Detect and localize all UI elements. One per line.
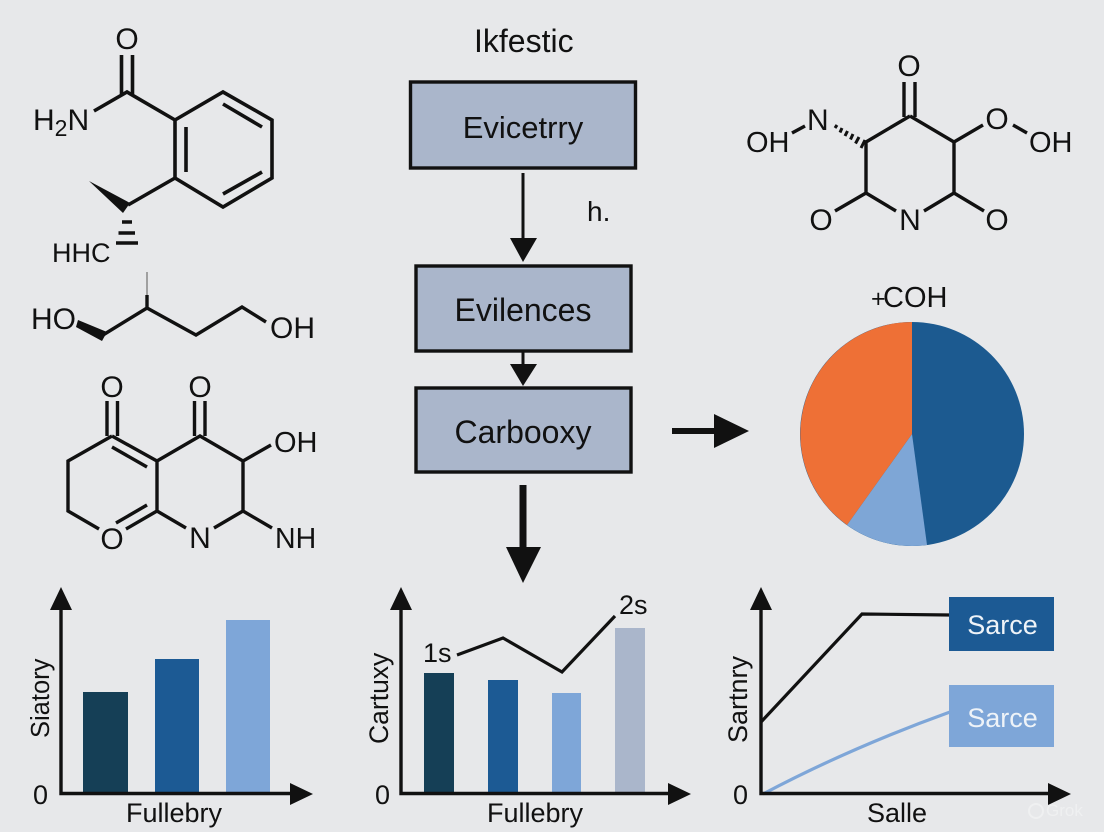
bar chart: left: Fullebry <box>126 798 223 828</box>
molecule: bicyclic lower left: OH <box>274 427 318 459</box>
bar and line chart: middle: 0 <box>375 780 390 810</box>
arrow: right to pie chart <box>672 414 749 448</box>
molecule: top right ring: N <box>899 204 921 237</box>
pie chart label: COH <box>883 282 947 314</box>
pie chart <box>800 322 1024 546</box>
molecule: top right ring: O <box>985 204 1009 237</box>
molecule: top right ring: O <box>809 204 833 237</box>
molecule: diol chain: HO <box>31 303 76 336</box>
bar chart: left: Siatory <box>27 658 55 738</box>
molecule: bicyclic lower left: NH <box>275 523 316 555</box>
molecule: top left benzamide: N <box>67 104 89 137</box>
line chart: right <box>723 587 1071 828</box>
line chart: right: 0 <box>733 780 748 810</box>
molecule: top right ring: N <box>807 104 829 137</box>
flow box: Evicetrry <box>410 82 636 168</box>
molecule: top left benzamide: H <box>33 104 55 137</box>
molecule: top left benzamide: HHC <box>52 238 110 268</box>
molecule: top right ring: O <box>985 103 1009 136</box>
molecule: diol chain: OH <box>270 312 315 345</box>
molecule: bicyclic lower left: O <box>188 371 212 404</box>
arrow: first flow arrow <box>510 173 537 262</box>
line chart: right: Salle <box>867 798 927 828</box>
flow box: Evicetrry: Evicetrry <box>463 110 584 145</box>
line chart: right: Sarce <box>967 703 1038 733</box>
molecule: top left benzamide <box>33 23 272 268</box>
bar and line chart: middle: 2s <box>619 590 648 620</box>
flow box: Carbooxy <box>416 388 631 472</box>
heading: flowchart title: Ikfestic <box>474 23 574 59</box>
molecule: top left benzamide: 2 <box>55 115 67 141</box>
bar and line chart: middle <box>364 587 691 828</box>
molecule: bicyclic lower left: O <box>100 523 124 556</box>
bar and line chart: middle: Cartuxy <box>364 652 394 744</box>
bar chart: left: 0 <box>33 780 48 810</box>
molecule: bicyclic lower left: O <box>100 371 124 404</box>
molecule: top right ring <box>746 50 1072 237</box>
arrow: down to charts <box>506 485 541 583</box>
molecule: bicyclic lower left: N <box>189 522 211 555</box>
bar chart: left <box>27 587 313 828</box>
molecule: top right ring: OH <box>746 127 790 159</box>
watermark <box>1029 801 1083 820</box>
molecule: top right ring: O <box>897 50 921 83</box>
bar and line chart: middle: 1s <box>423 638 452 668</box>
label: h.: h. <box>587 196 610 227</box>
flow box: Carbooxy: Carbooxy <box>455 414 591 450</box>
molecule: top left benzamide: O <box>115 23 139 56</box>
molecule: diol chain <box>31 272 315 345</box>
bar and line chart: middle: Fullebry <box>487 798 584 828</box>
molecule: bicyclic lower left <box>68 371 318 556</box>
molecule: top right ring: OH <box>1029 127 1072 159</box>
line chart: right: Sartnry <box>723 655 753 743</box>
flow box: Evilences: Evilences <box>455 292 591 328</box>
arrow: second flow arrow <box>510 351 537 386</box>
flow box: Evilences <box>416 266 631 351</box>
pie chart label: + <box>871 285 886 313</box>
watermark: Grok <box>1046 801 1083 820</box>
line chart: right: Sarce <box>967 610 1038 640</box>
